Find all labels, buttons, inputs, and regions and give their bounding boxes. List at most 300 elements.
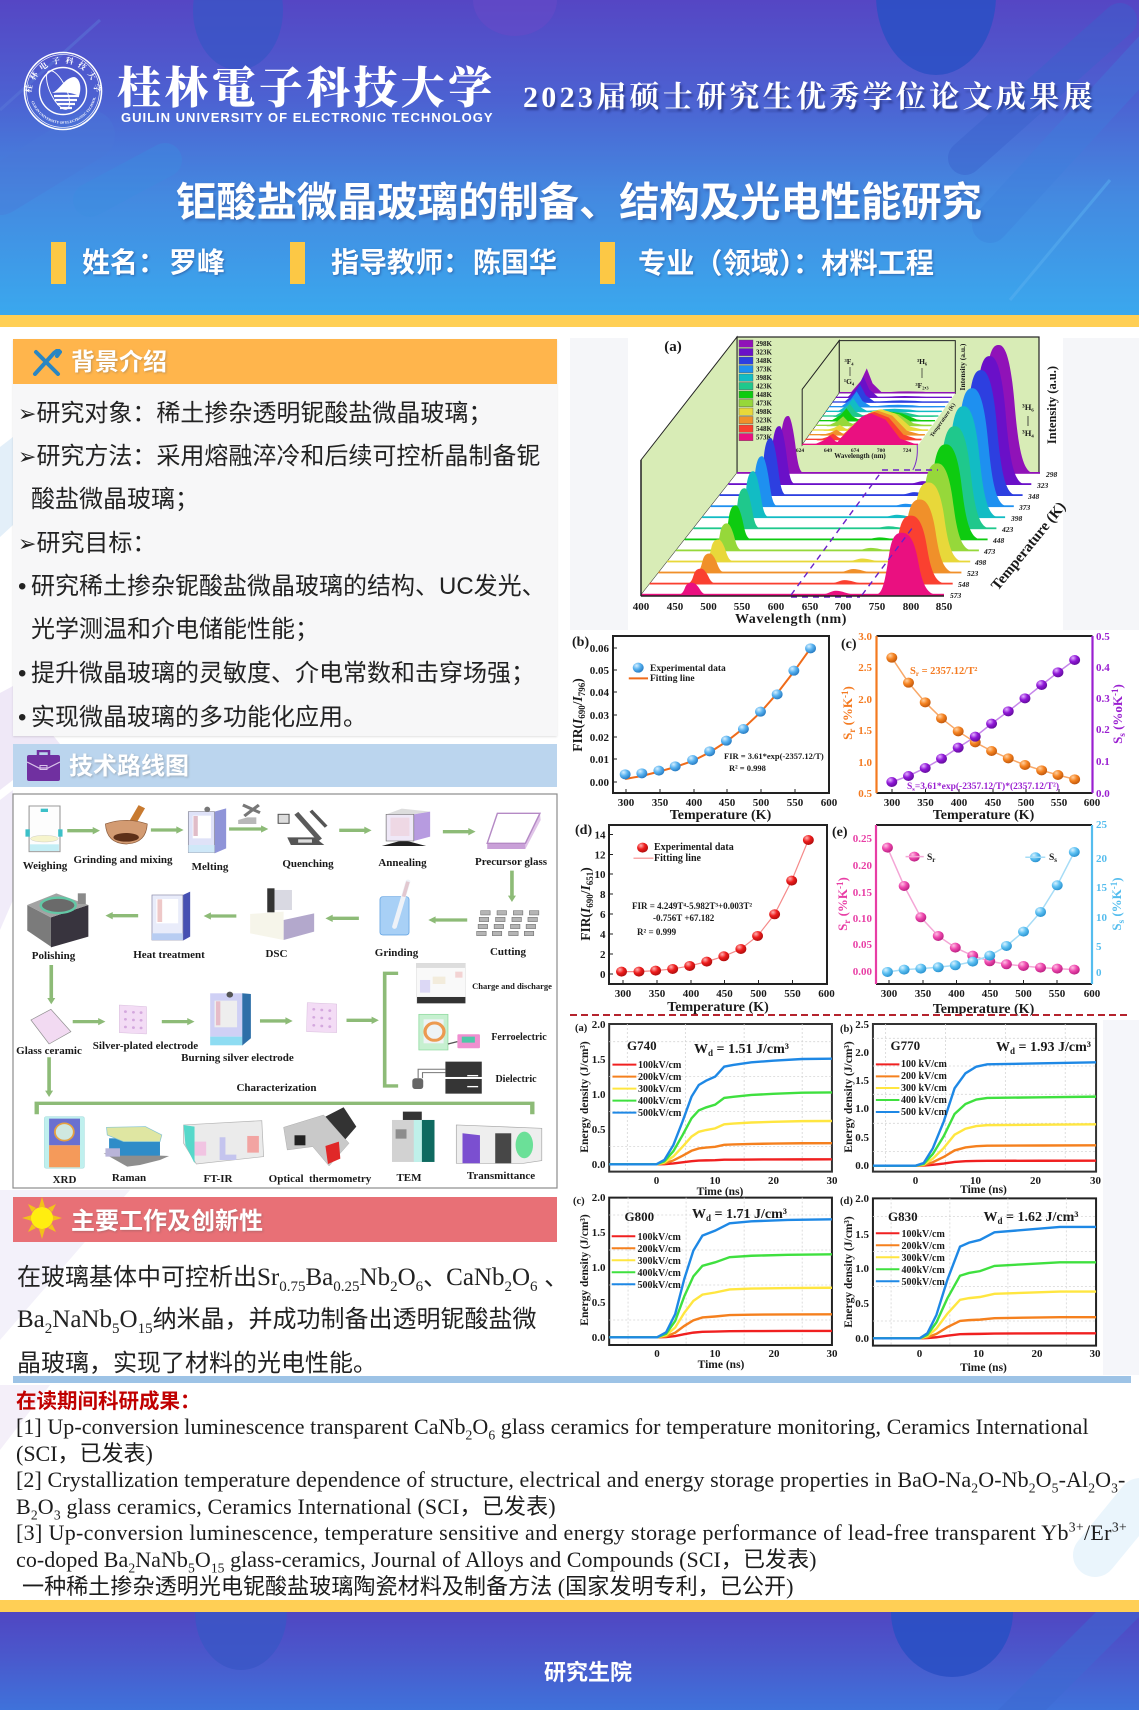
energy chart c: G800: 2.0 — [592, 1192, 606, 1204]
labels: 450 — [716, 988, 733, 1000]
inset labels: 624 — [796, 448, 804, 454]
energy chart c: G800: 0 — [654, 1348, 660, 1360]
labels: 12 — [594, 850, 606, 862]
labels — [901, 1059, 948, 1118]
chart d: FIR: R² = 0.999 — [637, 927, 677, 937]
icon: DSC — [250, 888, 314, 940]
frame and curves — [609, 1024, 832, 1172]
labels: 600 — [821, 797, 838, 809]
energy chart b: G770: 2.5 — [855, 1019, 870, 1031]
publication list: 一种稀土掺杂透明光电铌酸盐玻璃陶瓷材料及制备方法 (国家发明专利，已公开) — [22, 1574, 793, 1599]
chart b: FIR: R² = 0.998 — [729, 763, 766, 773]
chart d: FIR: / — [578, 890, 593, 895]
energy chart b: G770: 0.5 — [855, 1132, 870, 1144]
temperature axis: 548 — [958, 580, 970, 589]
labels: 400kV/cm — [638, 1096, 682, 1107]
energy chart c: G800: 30 — [826, 1348, 838, 1360]
labels: 350 — [915, 988, 932, 1000]
legend swatches: 323K — [756, 348, 772, 356]
labels: 0 — [600, 969, 606, 981]
panel: background — [13, 339, 557, 736]
chart b: FIR: Temperature (K) — [670, 808, 772, 823]
process labels: Melting — [192, 861, 229, 873]
energy chart a: G740: G740 — [627, 1038, 657, 1053]
labels: 500 — [753, 797, 770, 809]
arrows: process steps — [35, 825, 534, 1114]
inset labels: Wavelength (nm) — [834, 452, 886, 460]
text: research items: • — [18, 660, 26, 687]
legend swatches: 573K — [756, 434, 772, 442]
energy chart a: G740: 0 — [654, 1175, 660, 1187]
labels: 2.0 — [858, 694, 872, 706]
labels: 450 — [982, 988, 999, 1000]
process labels: DSC — [265, 948, 288, 960]
x tick labels: 750 — [869, 601, 886, 613]
labels — [853, 819, 1108, 1000]
data — [886, 653, 1080, 787]
energy chart a: G740: 0.0 — [592, 1159, 606, 1171]
text: main work: Ba2NaNb5O15纳米晶，并成功制备出透明铌酸盐微 — [17, 1306, 537, 1337]
process labels: Precursor glass — [475, 856, 548, 868]
chart d: FIR: Fitting line — [654, 853, 702, 864]
energy chart b: G770: d — [1010, 1046, 1015, 1056]
heading: publications: 在读期间科研成果： — [16, 1390, 200, 1413]
chart c: sensitivity: r — [916, 670, 919, 678]
labels: 0.15 — [853, 887, 872, 899]
process labels: Charge and discharge — [472, 981, 552, 991]
text: main work: 在玻璃基体中可控析出Sr0.75Ba0.25Nb2O6、CaNb2O6 、 — [17, 1264, 557, 1295]
energy chart a: G740: (a) — [575, 1023, 588, 1034]
icon: balance — [25, 806, 63, 852]
labels: 400 — [686, 797, 703, 809]
energy chart c: G800: 20 — [768, 1348, 780, 1360]
temperature axis: 573 — [950, 591, 962, 600]
frame and curves — [609, 1198, 832, 1345]
x tick labels: 500 — [700, 601, 717, 613]
process labels — [16, 854, 552, 1186]
temperature axis: 423 — [1001, 525, 1014, 534]
labels: 300kV/cm — [638, 1256, 682, 1267]
energy chart d: G830: 0 — [917, 1348, 923, 1360]
labels — [638, 1060, 682, 1119]
transition label: ³H₆ — [1022, 402, 1034, 412]
energy chart d: G830: G830 — [888, 1209, 918, 1224]
x tick labels: 400 — [633, 601, 650, 613]
labels: 550 — [1049, 988, 1066, 1000]
labels — [902, 1229, 946, 1288]
temperature axis: 298 — [1045, 470, 1058, 479]
process labels: Transmittance — [467, 1170, 535, 1182]
publication list: (SCI，已发表) — [16, 1441, 153, 1466]
process labels: TEM — [396, 1172, 422, 1184]
info: major — [600, 242, 935, 284]
chart d: FIR: Experimental data — [654, 842, 734, 853]
chart c: sensitivity: s — [912, 786, 915, 793]
energy chart c: G800: G800 — [624, 1209, 654, 1224]
icon: precursor glass — [487, 813, 541, 849]
labels: 0.10 — [853, 913, 872, 925]
icon: grinding cup — [380, 882, 409, 935]
temperature axis: 373 — [1018, 503, 1030, 512]
chart e: sensitivity: s — [1116, 919, 1126, 923]
info: supervisor: 指导教师：陈国华 — [331, 247, 557, 278]
info: name — [51, 242, 226, 284]
temperature axis — [950, 470, 1069, 600]
data — [620, 643, 816, 779]
inset labels: Intensity (a.u.) — [958, 343, 967, 390]
text: research items: 研究稀土掺杂铌酸盐微晶玻璃的结构、UC发光、 — [31, 573, 546, 600]
chart e: sensitivity: r — [932, 856, 935, 864]
labels: 400 kV/cm — [901, 1095, 948, 1106]
labels: 600 — [818, 988, 835, 1000]
chart b: FIR: 796 — [577, 682, 587, 696]
energy chart d: G830: 10 — [973, 1348, 984, 1360]
temperature axis: Temperature (K) — [988, 499, 1069, 594]
labels: 200 kV/cm — [901, 1071, 948, 1082]
energy chart a: G740: 20 — [768, 1175, 780, 1187]
publication list: [3] Up-conversion luminescence, temperature sensitive and energy storage performance of lead-free transparent Yb3+/Er3+ — [16, 1520, 1127, 1545]
process labels: Polishing — [32, 950, 76, 962]
publication list: [1] Up-conversion luminescence transparent CaNb2O6 glass ceramics for temperature monitoring, Ceramics International — [16, 1414, 1089, 1442]
labels: 4 — [600, 929, 606, 941]
info: supervisor — [290, 242, 558, 284]
text: main work — [17, 1264, 557, 1376]
labels: 0.04 — [590, 687, 610, 699]
chart c: sensitivity: s — [1117, 733, 1127, 737]
chart e: sensitivity: s — [1054, 856, 1057, 864]
university english name: GUILIN UNIVERSITY OF ELECTRONIC TECHNOLOGY — [121, 110, 494, 125]
chart e: sensitivity: S — [835, 924, 850, 931]
text: research items: 实现微晶玻璃的多功能化应用。 — [31, 704, 367, 731]
energy chart a: G740: 1.0 — [592, 1089, 606, 1101]
publication list: B2O3 glass ceramics, Ceramics International (SCI，已发表) — [16, 1494, 556, 1522]
x tick labels: 600 — [768, 601, 785, 613]
icon: burning furnace — [210, 992, 251, 1046]
icon: heat treatment furnace — [152, 892, 190, 941]
labels: 0.5 — [858, 788, 872, 800]
labels: 100kV/cm — [638, 1232, 682, 1243]
energy chart b: G770: 10 — [970, 1175, 982, 1187]
exhibition title: 2023届硕士研究生优秀学位论文成果展 — [523, 81, 1096, 114]
chart c: sensitivity: (%oK — [1110, 695, 1125, 733]
process labels: FT-IR — [204, 1173, 234, 1185]
red dashed divider — [570, 1014, 1127, 1016]
legend swatches: 423K — [756, 382, 772, 390]
energy chart b: G770: Time (ns) — [960, 1184, 1007, 1196]
energy chart b: G770 — [840, 1019, 1102, 1196]
temperature axis: 348 — [1027, 492, 1040, 501]
labels: 0.00 — [853, 966, 872, 978]
temperature axis: 473 — [983, 547, 996, 556]
legend swatches: 498K — [756, 408, 772, 416]
labels: 0.06 — [590, 643, 610, 655]
inset labels — [796, 343, 967, 460]
labels: 200kV/cm — [638, 1244, 682, 1255]
chart e: sensitivity: Temperature (K) — [933, 1002, 1035, 1017]
chart c: sensitivity: = 2357.12/T² — [919, 666, 977, 677]
energy chart b: G770: 2.0 — [855, 1047, 870, 1059]
inset labels: 724 — [903, 448, 911, 454]
legend swatches: 548K — [756, 425, 772, 433]
chart d: FIR: (d) — [575, 823, 592, 838]
heading: background: 背景介绍 — [71, 349, 167, 376]
panel tag a: (a) — [664, 339, 682, 355]
labels: 0.05 — [590, 665, 610, 677]
chart c: sensitivity: =3.61*exp(-2357.12/T)*(2357.12/T²) — [915, 781, 1059, 792]
data — [616, 835, 814, 977]
process labels: Characterization — [236, 1082, 317, 1094]
process labels: Cutting — [490, 946, 527, 958]
chart e: sensitivity: (e) — [832, 825, 848, 840]
frame — [876, 825, 1092, 984]
icon: FT-IR — [184, 1121, 264, 1164]
labels: 0.0 — [1096, 788, 1110, 800]
labels: 500 — [750, 988, 767, 1000]
labels: 5 — [1096, 941, 1102, 953]
inset labels: 649 — [824, 448, 832, 454]
labels: 600 — [1084, 988, 1101, 1000]
inset labels: ³F₂,₃ — [915, 381, 929, 390]
energy chart a: G740: 30 — [826, 1175, 838, 1187]
heading: main work: 主要工作及创新性 — [71, 1208, 263, 1235]
icon: tools — [32, 349, 62, 376]
chart d: FIR: 651 — [585, 871, 595, 885]
labels: 3.0 — [858, 631, 872, 643]
icon: melting furnace — [188, 807, 226, 853]
process labels: XRD — [53, 1174, 76, 1186]
energy chart c: G800: 0.5 — [592, 1297, 606, 1309]
icon: charge discharge rig — [416, 963, 465, 1003]
chart e: sensitivity — [832, 819, 1126, 1017]
legend swatches: 298K — [756, 340, 772, 348]
text: research items: ➢研究目标： — [18, 530, 156, 557]
temperature axis: 448 — [992, 536, 1004, 545]
energy chart b: G770: 1.5 — [855, 1075, 870, 1087]
energy chart c: G800: Time (ns) — [698, 1359, 745, 1371]
labels: 300 kV/cm — [901, 1083, 948, 1094]
icon: quench stand — [238, 805, 260, 824]
x tick labels: 450 — [667, 601, 684, 613]
chart e: sensitivity: -1 — [1109, 881, 1119, 889]
labels: 400 — [948, 988, 965, 1000]
energy chart d: G830: 0.5 — [855, 1298, 870, 1310]
selection box dashes — [791, 470, 938, 597]
chart b: FIR: FIR = 3.61*exp(-2357.12/T) — [724, 751, 824, 761]
x tick labels: 700 — [835, 601, 852, 613]
frame — [613, 636, 829, 793]
transition label — [1022, 402, 1034, 438]
energy chart a: G740: 10 — [710, 1175, 721, 1187]
inset labels: Temperature (K) — [928, 402, 957, 438]
chart e: sensitivity: -1 — [835, 881, 845, 889]
text: research items: • — [18, 573, 26, 600]
chart d: FIR: -0.756T +67.182 — [653, 913, 715, 923]
labels: 400 — [683, 988, 700, 1000]
back and side walls — [641, 337, 1039, 595]
energy chart c: G800: 1.5 — [592, 1227, 606, 1239]
chart c: sensitivity — [840, 631, 1127, 823]
labels: 400kV/cm — [902, 1265, 946, 1276]
energy chart c: G800: Energy density (J/cm³) — [579, 1214, 591, 1326]
heading: main work — [13, 1197, 557, 1242]
x axis title: Wavelength (nm) — [735, 612, 847, 627]
labels: 500 — [1015, 988, 1032, 1000]
chart b: FIR: (b) — [572, 635, 589, 650]
energy chart b: G770: 1.0 — [855, 1103, 870, 1115]
energy chart a: G740: 1.5 — [592, 1054, 606, 1066]
process labels: Weighing — [23, 860, 68, 872]
energy chart b: G770: Energy density (J/cm³) — [843, 1041, 855, 1153]
icon: silver plated sample — [119, 1005, 147, 1034]
heading: technical route: 技术路线图 — [69, 753, 189, 780]
chart d: FIR: ) — [578, 867, 593, 872]
text: research items: ➢研究方法：采用熔融淬冷和后续可控析晶制备铌 — [18, 443, 540, 470]
energy chart b: G770: 0.0 — [855, 1160, 870, 1172]
labels: 100kV/cm — [902, 1229, 946, 1240]
labels: 500kV/cm — [902, 1277, 946, 1288]
chart c: sensitivity: ) — [1110, 684, 1125, 688]
labels: 0.00 — [590, 777, 610, 789]
labels — [594, 830, 835, 1000]
labels — [638, 1232, 682, 1291]
chart b: FIR: FIR(I — [570, 719, 585, 752]
energy chart d: G830: 1.0 — [855, 1263, 870, 1275]
labels: 550 — [787, 797, 804, 809]
chart c: sensitivity: S — [907, 782, 912, 792]
energy chart c: G800: d — [706, 1213, 711, 1223]
labels: 300kV/cm — [902, 1253, 946, 1264]
inset labels: 700 — [877, 448, 885, 454]
chart e: sensitivity: (%K — [1109, 888, 1124, 920]
chart b: FIR: 690 — [577, 705, 587, 719]
energy chart d: G830: 30 — [1090, 1348, 1101, 1360]
frame and curves — [873, 1024, 1096, 1172]
university logo: 桂林电子科技大学 — [25, 56, 101, 93]
labels: 0.05 — [853, 939, 872, 951]
labels: 200kV/cm — [902, 1241, 946, 1252]
x tick labels — [633, 601, 953, 613]
text: research items: 酸盐微晶玻璃； — [31, 486, 199, 513]
labels: 0.4 — [1096, 662, 1110, 674]
info: major: 专业（领域）：材料工程 — [638, 247, 934, 279]
labels: 300 — [618, 797, 635, 809]
publication list: co-doped Ba2NaNb5O15 glass-ceramics, Journal of Alloys and Compounds (SCI，已发表) — [16, 1547, 816, 1575]
labels: 25 — [1096, 819, 1108, 831]
chart c: sensitivity: Temperature (K) — [933, 808, 1035, 823]
legend swatches — [739, 340, 772, 442]
energy chart d: G830: Time (ns) — [960, 1362, 1007, 1374]
labels: 0.01 — [590, 754, 609, 766]
labels: 0 — [1096, 967, 1102, 979]
process labels: Silver-plated electrode — [93, 1040, 198, 1052]
legend swatches: 448K — [756, 391, 772, 399]
chart e: sensitivity: r — [842, 920, 852, 924]
x tick labels: 650 — [802, 601, 819, 613]
chart b: FIR: I — [570, 695, 585, 702]
labels: 1.0 — [858, 757, 872, 769]
chart d: FIR: FIR = 4.249T⁴-5.982T³+0.003T² — [632, 901, 752, 911]
icon: Raman — [104, 1127, 169, 1167]
chart b: FIR: Fitting line — [650, 674, 695, 684]
labels: 0.5 — [1096, 631, 1110, 643]
labels: 400kV/cm — [638, 1268, 682, 1279]
bottom yellow band — [0, 1600, 1139, 1612]
footer text: 研究生院 — [544, 1660, 632, 1685]
icon: XRD — [44, 1117, 84, 1168]
labels: 500 kV/cm — [901, 1107, 948, 1118]
energy chart c: G800: = 1.71 J/cm³ — [711, 1207, 787, 1222]
labels: 0.25 — [853, 833, 872, 845]
chart e: sensitivity: S — [927, 853, 932, 863]
text: research items: ➢研究对象：稀土掺杂透明铌酸盐微晶玻璃； — [18, 400, 492, 427]
icon: transmittance rig — [456, 1125, 542, 1163]
chart e: sensitivity: (%K — [835, 888, 850, 920]
energy chart c: G800: 1.0 — [592, 1262, 606, 1274]
icon: dielectric rig — [412, 1062, 482, 1094]
text: research items — [18, 400, 546, 731]
icon: optical thermometry — [284, 1107, 356, 1166]
inset spectra — [802, 341, 955, 470]
icon: briefcase — [27, 750, 60, 781]
chart c: sensitivity: -1 — [840, 690, 850, 698]
energy chart c: G800 — [573, 1192, 838, 1371]
frame — [876, 636, 1092, 793]
icon: cut samples — [477, 911, 539, 936]
process labels: Optical thermometry — [269, 1173, 372, 1185]
labels: 350 — [652, 797, 669, 809]
process labels: Heat treatment — [133, 949, 205, 961]
publication list — [16, 1414, 1127, 1599]
labels: 450 — [719, 797, 736, 809]
energy chart b: G770: G770 — [890, 1038, 920, 1053]
labels: 0.2 — [1096, 724, 1110, 736]
icon: annealing furnace — [382, 809, 430, 846]
process labels: Dielectric — [495, 1074, 537, 1085]
chart c: sensitivity: S — [1110, 737, 1125, 744]
chart b: FIR: Experimental data — [650, 664, 726, 674]
icon: electroded sample — [307, 1003, 337, 1033]
energy chart d: G830: W — [984, 1210, 998, 1225]
labels: 300 — [615, 988, 632, 1000]
energy chart b: G770: = 1.93 J/cm³ — [1015, 1040, 1091, 1055]
blue divider — [13, 1376, 1131, 1383]
legend swatches: 473K — [756, 400, 772, 408]
energy chart d: G830 — [840, 1193, 1101, 1374]
chart d: FIR: Temperature (K) — [667, 1000, 769, 1015]
process labels: Burning silver electrode — [181, 1052, 294, 1064]
axis baseline — [641, 460, 944, 596]
energy chart c: G800: 10 — [710, 1348, 721, 1360]
chart e: sensitivity: S — [1109, 923, 1124, 931]
energy chart a: G740: W — [694, 1042, 708, 1057]
temperature axis: 398 — [1010, 514, 1022, 523]
labels: 1.5 — [858, 725, 872, 737]
x tick labels: 800 — [903, 601, 920, 613]
thesis title: 钜酸盐微晶玻璃的制备、结构及光电性能研究 — [176, 180, 982, 225]
icon: polisher — [27, 893, 88, 947]
chart e: sensitivity: ) — [835, 877, 850, 881]
labels: 300 — [884, 797, 901, 809]
university name: 桂林電子科技大学 — [117, 52, 495, 116]
labels: 20 — [1096, 853, 1108, 865]
footer banner — [0, 1612, 1139, 1710]
chart d: FIR: FIR(I — [578, 908, 593, 941]
labels: 0.03 — [590, 710, 610, 722]
energy chart a: G740 — [575, 1019, 838, 1198]
labels: 350 — [917, 797, 934, 809]
chart e: sensitivity: S — [1049, 853, 1054, 863]
energy chart d: G830: (d) — [840, 1196, 853, 1207]
